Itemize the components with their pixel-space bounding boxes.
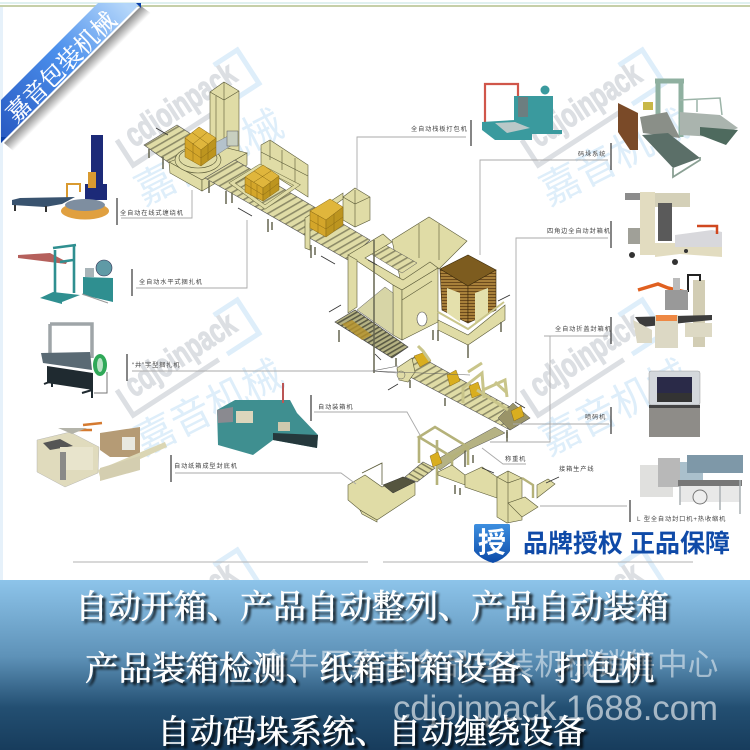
machine: coder [649,371,700,437]
case packer box [348,463,415,522]
label: cross strapper: “井”字型捆扎机 [132,361,180,369]
banner line 2: 产品装箱检测、纸箱封箱设备、打包机 [85,651,654,688]
leader: coder [513,407,611,434]
leader: pallet strapper [357,120,471,190]
stack platform [438,302,505,358]
watermark: bottom right [514,547,664,665]
watermark: top right: 嘉音机械 [533,102,696,214]
bottom banner panel [0,580,750,750]
pallet load 2 [245,165,279,201]
leader: carton erector [171,455,356,484]
label: folding sealer: 全自动折盖封箱机 [555,325,612,333]
leader: wrapper [117,190,192,225]
leader: corner sealer [516,221,611,403]
authorized badge [474,524,510,563]
leader: folding sealer [490,317,612,442]
label: upstream line: 接箱生产线 [559,465,594,473]
pallet load 3 [310,199,343,237]
flow arrows [156,128,525,473]
watermark: top left: cdjoinpack [118,55,243,155]
label: shrink wrapper: L 型全自动封口机+热收缩机 [637,515,726,523]
brand guarantee text: 品牌授权 正品保障 [523,530,730,558]
leader: upstream line [546,465,594,483]
watermark: bottom right: cdjoinpack [523,555,648,655]
machine: carton erector [37,423,167,487]
case on lower conveyor [430,452,442,467]
leader: horizontal strapper [132,220,247,296]
watermark: middle left: 嘉音机械 [128,352,291,464]
label: coder: 喷码机 [585,413,606,421]
sealing arches [418,346,508,410]
leader: case packer [311,395,420,435]
watermark: top right: cdjoinpack [523,55,648,155]
machine: palletizer [618,80,738,177]
leader: palletizer [480,143,611,255]
watermark: middle right [514,297,696,464]
banner line 1: 自动开箱、产品自动整列、产品自动装箱 [75,589,669,626]
machine: packing machine [217,383,318,455]
watermark: bottom left: cdjoinpack [118,555,243,655]
machine: pallet strapper [482,84,562,140]
pallet stack [440,255,496,325]
label: weigher: 称重机 [505,455,526,463]
watermark: top left: 嘉音机械 [128,102,291,214]
machine: pallet wrapper [12,135,109,220]
store name watermark: 金牛区嘉音食品包装机械销售中心 [258,647,718,682]
watermark: middle right: cdjoinpack [523,305,648,405]
label: horizontal strapper: 全自动水平式捆扎机 [139,278,203,286]
main roller conveyor [205,160,370,260]
leader: cross strapper [127,354,470,381]
watermark: middle right: 嘉音机械 [533,352,696,464]
store url watermark: cdjoinpack.1688.com [393,689,718,728]
label: palletizer: 码垛系统 [578,150,606,158]
leader: weigher [482,448,526,464]
top border lines [0,2,750,580]
case packing frame [419,427,468,485]
label: wrapper: 全自动在线式缠绕机 [120,209,184,217]
label: pallet strapper: 全自动栈板打包机 [411,125,468,133]
strapping head [305,188,370,250]
lower conveyor [405,427,507,482]
upper case conveyor [397,355,530,438]
machine: cross strapper [41,324,107,398]
badge character: 授 [478,527,506,558]
watermark: top left [109,47,291,214]
label: case packer: 自动装箱机 [318,403,353,411]
watermark: middle left: cdjoinpack [118,305,243,405]
banner line 3: 自动码垛系统、自动缠绕设备 [157,714,586,750]
wrapping tower [169,82,247,191]
separator lines [73,561,693,563]
weighing conveyor [438,465,497,498]
label: corner sealer: 四角边全自动封箱机 [547,227,611,235]
corner ribbon: 嘉音包装机械 [1,7,122,128]
machine: shrink wrapper [640,455,743,514]
watermark: middle left [109,297,291,464]
process line diagram [144,82,555,523]
machine: corner sealer [625,192,722,265]
infeed roller conveyor [144,125,205,169]
label: carton erector: 自动纸箱成型封底机 [174,462,238,470]
watermark: bottom left [109,547,259,665]
stretch cabinet [232,140,308,207]
watermark: top right [514,47,696,214]
palletizing enclosure [335,217,467,373]
pallet load 1 [185,127,216,166]
discharge tower [497,471,555,523]
machine: folding sealer [633,275,712,348]
corner ribbon [1,3,152,155]
machine: horizontal strapper [18,245,113,304]
case on upper conveyor [414,352,524,421]
